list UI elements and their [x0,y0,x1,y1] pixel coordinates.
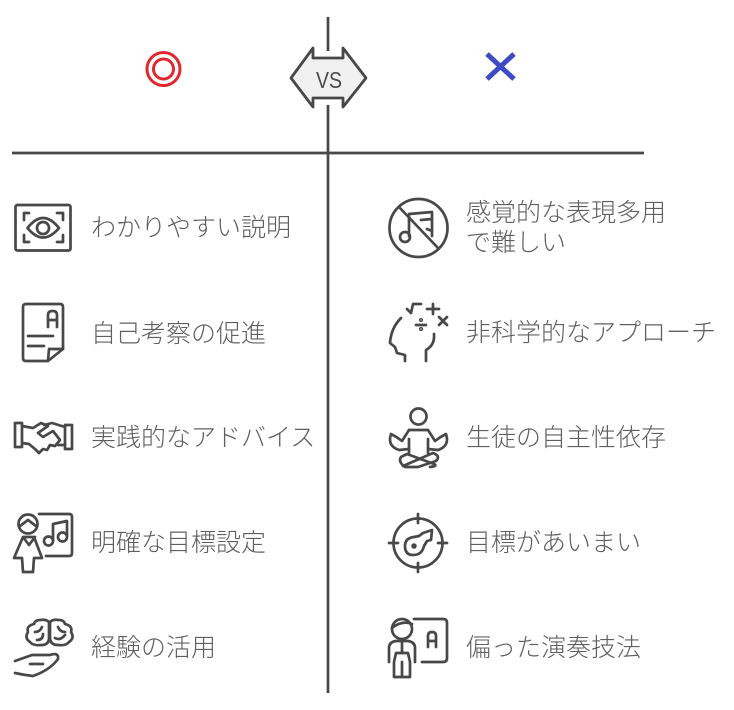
icon: crossed-out music note [390,199,448,257]
text: 生徒の自主性依存: 生徒の自主性依存 [466,424,666,452]
text: 感覚的な表現多用で難しい [466,199,666,257]
text: 実践的なアドバイス: 実践的なアドバイス [91,424,315,452]
icon: key in target [389,514,447,572]
icon: teacher with letter A board [389,619,447,677]
icon: eye in frame [16,205,70,250]
icon: head with math symbols [390,304,447,361]
icon: document with letter A [23,304,63,361]
text: 経験の活用: 経験の活用 [91,634,216,662]
icon: handshake [15,423,72,453]
icon: blue cross [487,54,514,79]
text: 感覚的な表現多用で難しい: 感覚的な表現多用 [466,199,666,227]
icon: brain over open hand [15,620,73,676]
icon: teacher with music note board [14,514,72,572]
text: 偏った演奏技法: 偏った演奏技法 [466,634,641,662]
VS badge: VS [316,67,342,93]
icon: red double circle [147,52,180,86]
icon: meditating figure [390,408,447,467]
text: 目標があいまい: 目標があいまい [466,529,641,557]
text: 非科学的なアプローチ: 非科学的なアプローチ [466,319,716,347]
text: 自己考察の促進: 自己考察の促進 [91,320,266,348]
text: わかりやすい説明: わかりやすい説明 [91,214,291,242]
text: 感覚的な表現多用で難しい: で難しい [466,229,566,257]
VS badge [291,48,366,107]
text: 明確な目標設定: 明確な目標設定 [91,529,266,557]
